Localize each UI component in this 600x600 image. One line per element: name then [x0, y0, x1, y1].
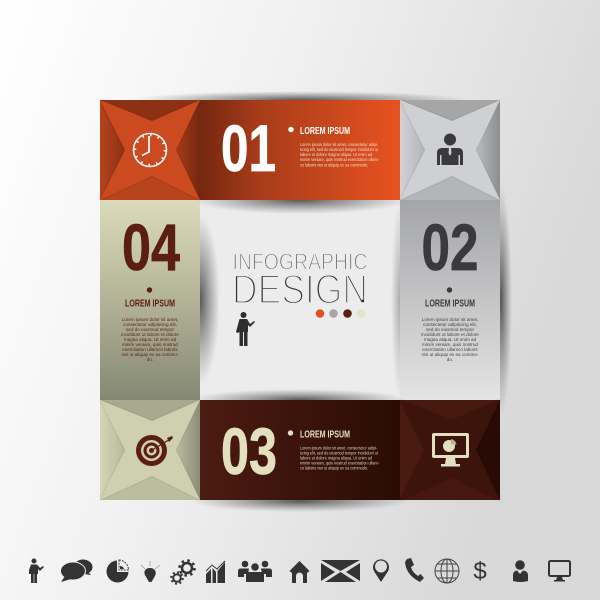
icon: globe: [435, 559, 459, 583]
icon: house: [290, 561, 310, 583]
body text: [300, 142, 379, 168]
body text: labore et dolore magna aliqua. Ut enim ad: [300, 152, 372, 157]
icon: light bulb: [141, 561, 160, 582]
bullet: [288, 127, 294, 132]
body text: incididunt ut labore et dolore: [121, 332, 179, 337]
bullet: [288, 430, 293, 436]
icon: clock: [134, 134, 166, 166]
panel 04: olive column: [100, 200, 200, 400]
body text: scing elit, sed do eiusmod tempor incididunt ut: [300, 147, 379, 152]
number 01: 01: [221, 111, 276, 185]
corner tile: olive with target: [100, 400, 200, 500]
icon: pie chart: [107, 560, 128, 582]
body text: Lorem ipsum dolor sit amet, consectetur adipi-: [300, 446, 377, 450]
body text: minim veniam, quis nostrud: [122, 342, 178, 347]
body text: co laboris nisi ut aliquip ex ea commodo.: [300, 162, 368, 168]
heading: LOREM IPSUM: [125, 298, 175, 310]
heading: LOREM IPSUM: [425, 298, 475, 310]
icon: monitor with pie chart: [432, 433, 469, 466]
body text: magna aliqua. Ut enim ad: [424, 337, 477, 342]
icon: monitor: [549, 561, 570, 582]
body text: [421, 317, 479, 362]
heading: LOREM IPSUM: [300, 125, 350, 137]
body text: do.: [447, 357, 453, 362]
icon: gears: [171, 560, 194, 584]
body text: labore et dolore magna aliqua. Ut enim ad: [300, 456, 372, 460]
panel 01: orange band: [200, 100, 400, 200]
body text: consectetur adipiscing elit,: [123, 322, 177, 327]
corner tile: orange with clock: [100, 100, 200, 200]
body text: co laboris nisi ut aliquip ex ea commodo.: [300, 466, 368, 470]
body text: [300, 446, 379, 470]
icon: target: [136, 435, 173, 466]
body text: sed do eiusmod tempor: [426, 327, 474, 332]
body text: minim veniam, quis nostrud: [422, 342, 478, 347]
center panel: [180, 186, 410, 411]
icon: businessman: [437, 134, 463, 165]
number 04: 04: [122, 210, 180, 284]
icon: presenter: [236, 312, 255, 346]
bullet: [147, 287, 152, 293]
body text: sed do eiusmod tempor: [126, 327, 174, 332]
body text: minim veniam, quis nostrud exercitation ullam-: [300, 460, 379, 466]
body text: incididunt ut labore et dolore: [421, 332, 479, 337]
panel 02: grey column: [400, 200, 500, 400]
title: DESIGN: [232, 266, 368, 312]
colour dots: [316, 309, 365, 318]
icon row: [29, 558, 570, 585]
icon: dollar: $: [473, 558, 487, 585]
body text: consectetur adipiscing elit,: [423, 322, 477, 327]
icon: envelope: [321, 560, 360, 582]
bullet: [447, 287, 452, 293]
panel shadows: [130, 91, 512, 512]
body text: exercitation ullamco laboris: [122, 347, 178, 352]
body text: minim veniam, quis nostrud exercitation ullam-: [300, 157, 379, 162]
icon: presenter: [29, 558, 44, 583]
number 03: 03: [221, 414, 277, 488]
icon: user: [513, 560, 528, 582]
body text: scing elit, sed do eiusmod tempor incididunt ut: [300, 450, 379, 456]
panel 03: brown band: [200, 400, 400, 500]
title: [232, 248, 368, 312]
body text: exercitation ullamco laboris: [422, 347, 478, 352]
heading: LOREM IPSUM: [300, 428, 350, 440]
body text: nisi ut aliquip ex ea commo-: [422, 352, 479, 357]
body text: Lorem ipsum dolor sit amet, consectetur adipi-: [300, 142, 378, 147]
icon: speech bubbles: [60, 560, 92, 582]
body text: Lorem ipsum dolor sit amet,: [122, 317, 178, 322]
icon: map pin: [373, 559, 389, 582]
corner tile: grey with person: [400, 100, 500, 200]
number 02: 02: [422, 210, 478, 284]
icon: team: [238, 561, 272, 582]
title: INFOGRAPHIC: [232, 248, 368, 274]
body text: magna aliqua. Ut enim ad: [124, 337, 177, 342]
icon: phone: [405, 558, 424, 582]
body text: [121, 317, 179, 362]
body text: do.: [147, 357, 153, 362]
icon: growth chart: [206, 561, 225, 583]
body text: nisi ut aliquip ex ea commo-: [122, 352, 179, 357]
corner tile: brown with monitor: [400, 400, 500, 500]
body text: Lorem ipsum dolor sit amet,: [422, 317, 478, 322]
